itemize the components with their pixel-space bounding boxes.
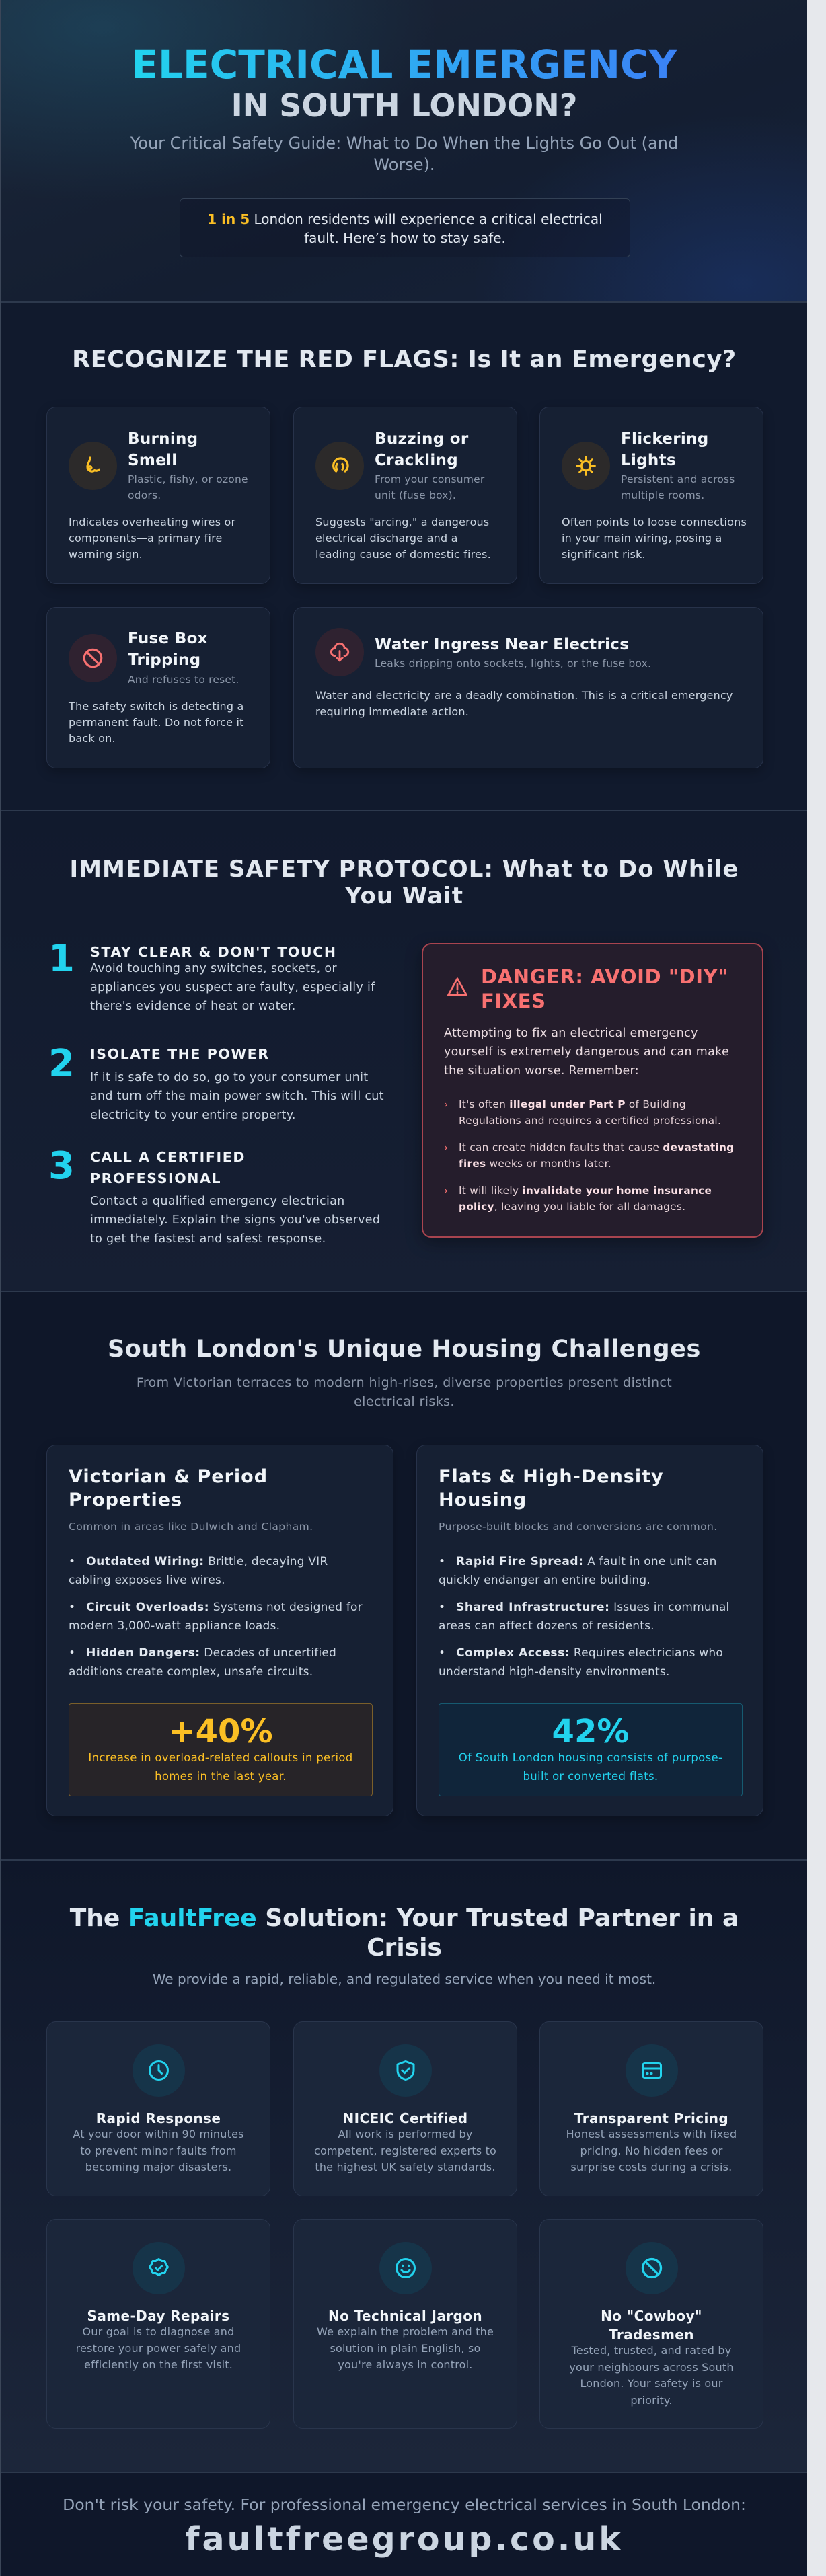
icon: clock (132, 2044, 184, 2097)
subtitle heading: IN SOUTH LONDON? (231, 87, 577, 124)
step 3: CALL A CERTIFIED (90, 1149, 246, 1165)
card: fuse box: Fuse Box (128, 630, 208, 647)
card: no cowboy: Tested, trusted, and rated by your neighbours across South London. Your safety is our priority. (569, 2344, 734, 2407)
card: flats (416, 1445, 763, 1816)
heading (70, 1904, 739, 1962)
panel: danger DIY (422, 943, 763, 1238)
panel: danger DIY: › (444, 1098, 448, 1111)
heading: The FaultFree Solution: Your Trusted Partner in a (70, 1904, 739, 1932)
card: water ingress: Leaks dripping onto sockets, lights, or the fuse box. (375, 657, 651, 670)
card: burning smell: Burning (128, 430, 198, 448)
tagline (130, 134, 678, 174)
card: flats: Purpose-built blocks and conversions are common. (439, 1521, 718, 1533)
card: NICEIC: All work is performed by (338, 2128, 472, 2140)
card: flickering: Lights (621, 452, 676, 469)
card: burning smell: Plastic, fishy, or ozone odors. (128, 473, 248, 501)
card: flats: Rapid Fire Spread: A fault in one unit can quickly endanger an entire building. (439, 1555, 717, 1587)
card: flickering: Flickering (621, 430, 708, 448)
section: housing (1, 1291, 807, 1860)
card: same-day: Our goal is to diagnose and restore your power safely and efficiently on the first visit. (76, 2325, 241, 2371)
card: victorian: Common in areas like Dulwich and Clapham. (69, 1521, 313, 1533)
step 3 (48, 1144, 380, 1246)
card: flickering: Often points to loose connections in your main wiring, posing a significant risk. (562, 516, 747, 561)
stat: +40%: +40% (168, 1713, 273, 1750)
step 3: 3 (48, 1144, 75, 1188)
card: NICEIC: competent, registered experts to (314, 2144, 496, 2157)
card: burning smell: Indicates overheating wires or components—a primary fire warning sign. (69, 516, 235, 561)
card: rapid response (46, 2021, 270, 2196)
panel: danger DIY: It will likely invalidate your home insurance policy, leaving you liable for all damages. (459, 1184, 712, 1213)
heading: Crisis (367, 1934, 442, 1962)
card: no cowboy: Tradesmen (609, 2327, 694, 2343)
title: ELECTRICAL EMERGENCY (131, 42, 677, 87)
step 2 (48, 1042, 384, 1122)
card: flats: Flats & High-Density (439, 1466, 664, 1487)
card: flickering: Persistent and across multiple rooms. (621, 473, 735, 501)
card: water ingress: Water and electricity are a deadly combination. This is a critical emergency requiring immediate action. (315, 689, 733, 718)
stat: +40%: homes in the last year. (155, 1770, 287, 1783)
icon: shield (379, 2044, 432, 2097)
card: fuse box: Tripping (128, 651, 200, 669)
stat: 42%: Of South London housing consists of purpose- (459, 1751, 722, 1764)
step 1: STAY CLEAR & DON'T TOUCH (90, 944, 337, 960)
stat: +40% (69, 1703, 373, 1796)
tagline: Your Critical Safety Guide: What to Do When the Lights Go Out (and (130, 134, 678, 153)
card: NICEIC (293, 2021, 517, 2196)
section: solution: We provide a rapid, reliable, and regulated service when you need it most. (153, 1971, 656, 1987)
panel: danger DIY: › (444, 1141, 448, 1154)
card: water ingress: Water Ingress Near Electrics (375, 636, 629, 653)
card: pricing (539, 2021, 763, 2196)
icon: smile (379, 2242, 432, 2294)
panel: danger DIY: Attempting to fix an electrical emergency yourself is extremely dangerous and can make the situation worse. Remember: (444, 1027, 729, 1078)
heading: You Wait (345, 883, 463, 910)
step 1: Avoid touching any switches, sockets, or appliances you suspect are faulty, especially if there's evidence of heat or water. (90, 962, 375, 1013)
footer (1, 2472, 807, 2576)
card: buzzing: Suggests "arcing," a dangerous electrical discharge and a leading cause of domestic fires. (315, 516, 491, 561)
card: rapid response: Rapid Response (96, 2110, 221, 2126)
step 3: PROFESSIONAL (90, 1170, 221, 1186)
card: water ingress (293, 607, 763, 768)
card: burning smell (46, 407, 270, 584)
step 2: ISOLATE THE POWER (90, 1046, 270, 1062)
icon: bulb (562, 442, 610, 490)
panel: danger DIY: It's often illegal under Part P of Building (459, 1098, 686, 1111)
icon: badge check (132, 2242, 184, 2294)
step 2: If it is safe to do so, go to your consumer unit and turn off the main power switch. This will cut electricity to your entire property. (90, 1071, 384, 1122)
card: NICEIC: NICEIC Certified (343, 2110, 467, 2126)
section: housing: From Victorian terraces to modern high-rises, diverse properties present distinct (137, 1375, 672, 1390)
header section (1, 0, 807, 301)
section: housing: electrical risks. (354, 1394, 455, 1409)
card: flats: Housing (439, 1490, 527, 1511)
card: buzzing (293, 407, 517, 584)
card: buzzing: Crackling (375, 452, 458, 469)
card: no jargon: No Technical Jargon (328, 2308, 482, 2324)
section: safety protocol (1, 810, 807, 1291)
icon: cloud drip (315, 628, 364, 676)
step 2: 2 (48, 1042, 75, 1086)
heading: RECOGNIZE THE RED FLAGS: Is It an Emergency? (72, 346, 737, 373)
icon: arcs (315, 442, 364, 490)
card: fuse box: And refuses to reset. (128, 674, 239, 686)
icon: warning (447, 977, 467, 996)
panel: danger DIY: Regulations and requires a certified professional. (459, 1115, 721, 1127)
card: flats: Complex Access: Requires electricians who understand high-density environments. (439, 1646, 723, 1679)
step 3: Contact a qualified emergency electrician immediately. Explain the signs you've observed to get the fastest and safest response. (90, 1195, 380, 1246)
heading: IMMEDIATE SAFETY PROTOCOL: What to Do While (70, 856, 739, 883)
stat: +40%: Increase in overload-related callouts in period (88, 1751, 353, 1764)
card: no jargon: you're always in control. (338, 2358, 473, 2371)
card: same-day (46, 2219, 270, 2429)
footer: Don't risk your safety. For professional emergency electrical services in South London: (63, 2495, 746, 2514)
panel: danger DIY: FIXES (481, 990, 546, 1012)
icon: ban (626, 2242, 678, 2294)
icon: card (626, 2044, 678, 2097)
panel: danger DIY: › (444, 1184, 448, 1197)
heading (70, 856, 739, 910)
card: victorian: Victorian & Period (69, 1466, 268, 1487)
card: no jargon: solution in plain English, so (330, 2342, 481, 2354)
card: same-day: Same-Day Repairs (87, 2308, 229, 2324)
callout: stat (180, 198, 630, 257)
card: victorian: cabling exposes live wires. (69, 1574, 225, 1587)
stat: 42% (439, 1703, 743, 1796)
section: red flags (1, 301, 807, 811)
card: fuse box (46, 607, 270, 768)
step 1 (48, 937, 375, 1013)
card: rapid response: At your door within 90 minutes to prevent minor faults from becoming major disasters. (73, 2128, 244, 2173)
card: pricing: Honest assessments with fixed pricing. No hidden fees or surprise costs during a crisis. (566, 2128, 737, 2173)
section: solution (1, 1859, 807, 2472)
card: no cowboy (539, 2219, 763, 2429)
card: victorian: Properties (69, 1490, 182, 1511)
card: fuse box: The safety switch is detecting a permanent fault. Do not force it back on. (69, 700, 244, 745)
stat: 42%: built or converted flats. (523, 1770, 658, 1783)
card: victorian: Hidden Dangers: Decades of uncertified additions create complex, unsafe circuits. (69, 1646, 336, 1679)
card: victorian (46, 1445, 393, 1816)
card: victorian: Outdated Wiring: Brittle, decaying VIR (86, 1555, 328, 1568)
card: flickering (539, 407, 763, 584)
callout: stat: 1 in 5 London residents will experience a critical electrical (207, 211, 603, 227)
card: flats: Shared Infrastructure: Issues in communal areas can affect dozens of residents. (439, 1601, 729, 1633)
card: NICEIC: the highest UK safety standards. (315, 2161, 496, 2173)
stat: 42%: 42% (552, 1713, 629, 1750)
card: no cowboy: No "Cowboy" (601, 2308, 702, 2324)
card: no jargon (293, 2219, 517, 2429)
heading: South London's Unique Housing Challenges (108, 1336, 701, 1363)
card: buzzing: From your consumer unit (fuse box). (375, 473, 484, 501)
callout: stat: fault. Here’s how to stay safe. (304, 230, 506, 246)
icon: flame (69, 442, 117, 490)
card: pricing: Transparent Pricing (574, 2110, 728, 2126)
card: no jargon: We explain the problem and the (317, 2325, 494, 2338)
card: burning smell: Smell (128, 452, 177, 469)
panel: danger DIY: DANGER: AVOID "DIY" (481, 965, 728, 988)
url: faultfreegroup.co.uk (185, 2520, 624, 2559)
card: victorian: Circuit Overloads: Systems not designed for modern 3,000-watt appliance loads. (69, 1601, 363, 1633)
tagline: Worse). (373, 155, 435, 174)
step 1: 1 (48, 937, 75, 981)
card: buzzing: Buzzing or (375, 430, 469, 448)
panel: danger DIY: It can create hidden faults that cause devastating fires weeks or months later. (459, 1141, 734, 1170)
icon: ban (69, 634, 117, 682)
